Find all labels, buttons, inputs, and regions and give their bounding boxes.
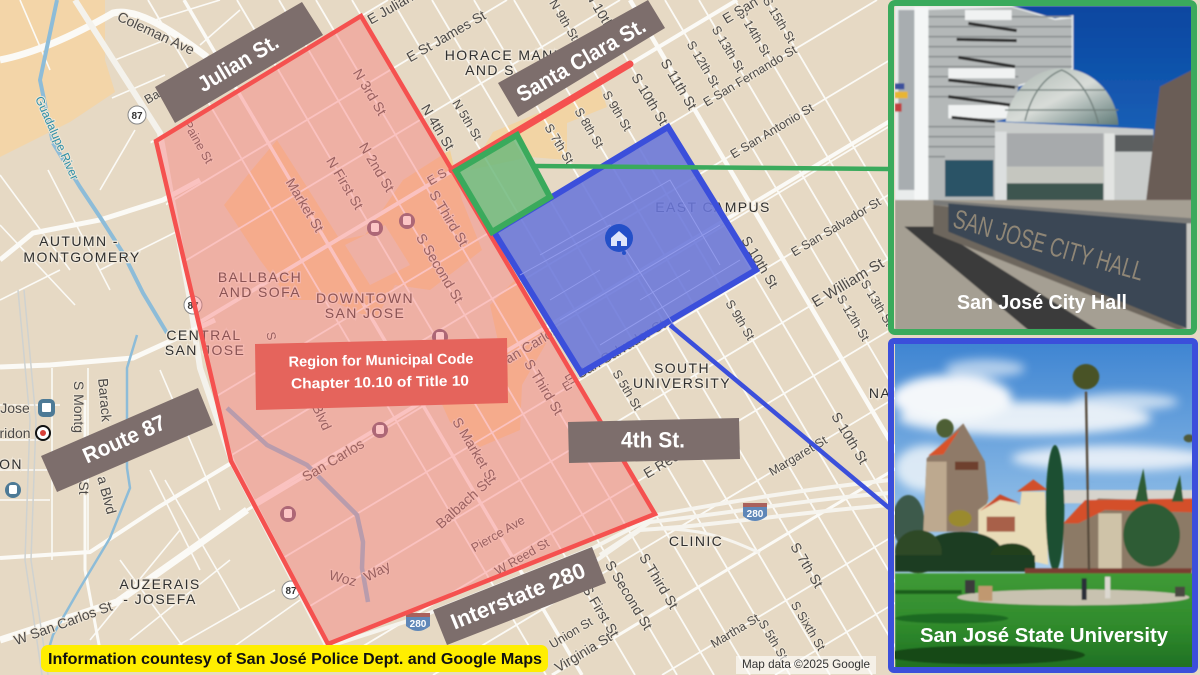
shield: 87 central: 87: [187, 301, 199, 312]
icon: transit station: [399, 213, 415, 229]
panel: San José State University photo: [885, 341, 1200, 670]
street labels: N 4th St: [418, 101, 458, 153]
region polygon: municipal code area: [156, 16, 655, 644]
shadow: [904, 227, 1098, 330]
neighborhood labels: SAN JOSE: [325, 305, 405, 321]
street labels: Market St: [283, 175, 327, 235]
red plantings: [1025, 568, 1192, 574]
street labels: E: [560, 378, 574, 394]
photo: city hall: [895, 6, 1194, 330]
street labels: S 11th St: [658, 56, 700, 112]
shield: 280 west: 280: [410, 619, 427, 630]
campus paths: [520, 180, 740, 345]
street labels: S 7th St: [542, 121, 577, 167]
street labels: N First St: [323, 154, 367, 212]
river branch: [43, 335, 137, 668]
icon: rail station: [38, 399, 55, 417]
neighborhood labels: SAN JOSE: [165, 342, 245, 358]
street labels: S Third St: [426, 187, 472, 249]
street labels: S Second St: [602, 558, 656, 633]
brown wall: [1146, 69, 1191, 201]
wall face: [948, 203, 1187, 328]
street labels: Margaret St: [766, 433, 830, 479]
street labels: E San Fernando St: [701, 42, 800, 109]
street labels: S 5th St: [610, 367, 645, 413]
dome: [1006, 68, 1118, 125]
neighborhood labels: AND S: [465, 62, 515, 78]
neighborhood labels: HORACE MANN: [445, 47, 565, 63]
label: 4th St.: 4th St.: [621, 428, 685, 452]
left side streets: [0, 0, 300, 670]
label: Interstate 280: [433, 547, 606, 645]
label: Santa Clara St.: Santa Clara St.: [512, 13, 650, 107]
label: Route 87: [41, 388, 213, 492]
credit banner: [41, 645, 548, 672]
street labels: Balbach St: [432, 474, 494, 532]
cream hall: [978, 492, 1048, 565]
right trees: [1123, 503, 1180, 567]
palm behind tower: [936, 419, 954, 438]
street labels: Union St: [547, 614, 596, 651]
peach zone near Santa Clara St: [470, 87, 607, 170]
street labels: Coleman Ave: [115, 8, 197, 58]
callout: region for municipal code: Region for Municipal Code: [288, 351, 474, 371]
shield: 280 west: [406, 613, 430, 631]
street labels: S Montg: [71, 381, 87, 433]
shield: 87 south: [282, 581, 300, 599]
street labels: Jose: [0, 400, 30, 416]
caption: San José State University: [920, 625, 1169, 647]
Guadalupe River: [40, 0, 167, 333]
street labels: S 10th St: [738, 233, 782, 291]
street labels: W Reed St: [492, 536, 552, 578]
map attribution: Map data ©2025 Google: [742, 657, 870, 671]
connector: SJSU to photo: [670, 325, 889, 508]
peach zones inside downtown: [224, 140, 482, 320]
street labels: ridon: [0, 425, 31, 441]
neighborhood labels: MONTGOMERY: [23, 249, 141, 265]
wall base: [933, 205, 1185, 330]
street labels: Way: [361, 557, 393, 585]
icon: transit station: [372, 422, 388, 438]
street labels: S Sixth St: [788, 599, 828, 654]
street labels: E San Carlos: [483, 322, 561, 378]
photo frame: [891, 3, 1194, 332]
neighborhood labels: BALLBACH: [218, 269, 302, 285]
muted block inside downtown peach zone: [345, 225, 410, 285]
white floor plates: [948, 10, 1015, 118]
street labels: Blvd: [309, 401, 335, 433]
street labels: Paine St: [180, 118, 216, 166]
highway shields: [128, 106, 767, 631]
Route 87 roadway: [75, 0, 340, 670]
neighborhood labels: CLINIC: [669, 533, 723, 549]
tower window bands: [922, 17, 1072, 157]
peach commercial zone: top left: [0, 0, 115, 157]
street labels: N 3rd St: [350, 66, 390, 118]
tower left column: [914, 7, 928, 200]
street grid: [147, 0, 895, 675]
shield: 87 south: 87: [285, 586, 297, 597]
street labels: E Reed St: [641, 435, 704, 481]
label: Julian St.: [155, 2, 323, 123]
icon: transit station: [5, 482, 21, 498]
tower: [895, 6, 1073, 203]
Interstate 280 roadway: [333, 480, 890, 645]
shadows: [895, 590, 962, 594]
street labels: S 5th St: [756, 617, 791, 663]
street labels: Virginia St: [552, 629, 614, 675]
neighborhood labels: - JOSEFA: [123, 591, 197, 607]
connector: City Hall to photo: [535, 166, 889, 169]
icon: light rail: [36, 426, 50, 440]
street labels: S 9th St: [723, 297, 758, 343]
street labels: N 2nd St: [356, 140, 398, 195]
neighborhood labels: CENTRAL: [166, 327, 242, 343]
label: 4th St.: [568, 418, 740, 463]
shield: 280 east: [743, 503, 767, 521]
shield: 87 central: [184, 296, 202, 314]
flags: [895, 83, 904, 89]
people: [1082, 578, 1087, 600]
street labels: E San Antonio St: [728, 100, 817, 161]
street labels: E S: [425, 166, 449, 188]
peach zone lower downtown: [440, 280, 548, 447]
street labels: S Second St: [413, 231, 467, 306]
label: Interstate 280: Interstate 280: [447, 558, 589, 634]
label: Julian St.: Julian St.: [193, 29, 283, 97]
plaza: [957, 589, 1189, 605]
street labels: S 13th St: [709, 23, 748, 75]
icon: transit station: [367, 220, 383, 236]
dark louvers: [948, 23, 1017, 122]
lawn: [895, 573, 1194, 670]
transit icons: [5, 213, 448, 522]
street labels: E St James St: [404, 7, 488, 65]
credit banner: Information countesy of San José Police Dept. and Google Maps: [48, 651, 542, 668]
photo: campus tower and lawn: [885, 343, 1200, 670]
photo frame: [891, 341, 1195, 670]
palm: [1086, 392, 1089, 570]
street labels: San Carlos: [299, 435, 367, 485]
caption: San José City Hall: [957, 292, 1127, 314]
icon: school: [605, 224, 633, 255]
neighborhood labels: DOWNTOWN: [316, 290, 414, 306]
neighborhood labels: AUTUMN -: [39, 233, 119, 249]
street labels: E San Salvador St: [789, 194, 884, 259]
ground: [895, 200, 1194, 330]
rear buildings: [1062, 490, 1194, 503]
street labels: S 13th St: [858, 277, 897, 329]
street labels: S First St: [579, 582, 623, 640]
street labels: E William St: [809, 254, 888, 311]
street labels: a Blvd: [94, 474, 120, 516]
street labels: S Third St: [636, 550, 682, 612]
street labels: Pierce Ave: [469, 513, 527, 555]
neighborhood labels: SOUTH: [654, 360, 710, 376]
street labels: S: [263, 331, 279, 341]
neighborhood labels: AUZERAIS: [119, 576, 201, 592]
street labels: S 8th St: [572, 105, 607, 151]
background trees: [895, 494, 925, 542]
street labels: S Market St: [449, 415, 501, 486]
neighborhood labels: UNIVERSITY: [633, 375, 731, 391]
street labels: N 5th St: [449, 97, 485, 143]
street labels: S 10th St: [628, 70, 672, 128]
neighborhood labels: EAST CAMPUS: [655, 199, 771, 215]
street labels: Martha St: [708, 611, 762, 651]
region: San José State University: [494, 127, 756, 373]
street labels: Ba: [142, 87, 162, 107]
west arterial roads: [0, 180, 333, 670]
Santa Clara St highlight: [452, 64, 630, 170]
street labels: S 9th St: [600, 88, 635, 134]
river downtown: [227, 408, 368, 602]
cypress: [1046, 445, 1064, 572]
street labels: W San Carlos St: [12, 598, 114, 648]
clouds: [892, 359, 1200, 492]
street labels: S 12th St: [684, 38, 723, 90]
rail corridor: [18, 290, 48, 675]
street labels: St: [76, 481, 92, 495]
shrubs: [934, 530, 1000, 572]
wall top: [933, 200, 1194, 224]
right hall: [1063, 498, 1194, 570]
callout: region for municipal code: Chapter 10.10 of Title 10: [291, 373, 469, 393]
icon: transit station: [280, 506, 296, 522]
street labels: E San Salvador St: [562, 316, 668, 388]
callout: region for municipal code: [255, 338, 508, 410]
shield: 87 north: 87: [131, 111, 143, 122]
street labels: S 10th St: [828, 409, 872, 467]
region: San José City Hall: [456, 135, 550, 232]
shield: 280 east: 280: [747, 509, 764, 520]
street labels: [0, 0, 897, 675]
shield: 87 north: [128, 106, 146, 124]
tower glazing: [922, 7, 1072, 200]
street labels: S 14th St: [735, 7, 774, 59]
street labels: S 12th St: [834, 292, 873, 344]
street labels: Guadalupe River: [32, 94, 82, 182]
neighborhood labels: [0, 47, 891, 607]
Coleman Ave: [0, 12, 207, 60]
rotunda: [995, 122, 1153, 203]
clock tower: [923, 423, 988, 532]
icon: transit station: [432, 329, 448, 345]
neighborhood labels: AND SOFA: [219, 284, 301, 300]
street labels: Woz: [328, 567, 358, 589]
street labels: S 7th St: [787, 540, 827, 591]
street labels: Barack: [95, 378, 115, 423]
label: Route 87: Route 87: [79, 410, 169, 468]
panel: San José City Hall photo: [888, 0, 1200, 338]
map background: [0, 0, 895, 675]
street labels: S Third St: [521, 356, 567, 418]
neighborhood labels: NA: [869, 385, 891, 401]
